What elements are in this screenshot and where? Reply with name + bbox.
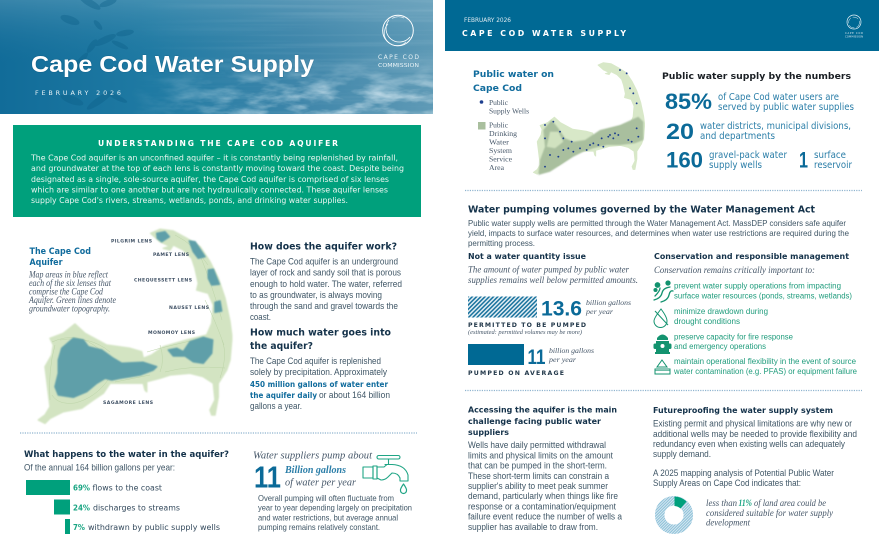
- donut chart: 11 percent: [660, 496, 688, 529]
- icon: stream and plants: [654, 281, 673, 302]
- comparison: not a water quantity issue: supplies remains well below permitted amounts.: [468, 275, 638, 285]
- text block: accessing the aquifer: supplier's ability to meet peak summer: [468, 481, 608, 491]
- text block: accessing the aquifer: failure event reduce the number of wells a: [468, 512, 622, 522]
- text block: water management act: yield, impacts to surface water resources, and determines when water use restrictions are required during the: [468, 228, 849, 238]
- item: surface water: surface water resources (ponds, streams, wetlands): [674, 292, 852, 300]
- stat: 85 percent: of Cape Cod water users are: [718, 92, 839, 103]
- item: fire response: and emergency operations: [674, 342, 766, 351]
- text block: accessing the aquifer: [468, 405, 622, 532]
- text block: how much water goes in: How much water goes into: [250, 328, 391, 339]
- donut caption: of land area could be: [754, 498, 826, 508]
- text block: futureproofing: Supply Areas on Cape Cod indicates that:: [653, 478, 801, 488]
- map caption: Aquifer. Green lines denote: [28, 295, 116, 305]
- list: conservation and responsible management: Conservation remains critically important to:: [654, 265, 815, 275]
- bar: pumped on average: 11: [528, 346, 546, 369]
- text block: how does the aquifer work: through the sand and gravel towards the: [250, 301, 398, 311]
- bar: permitted: per year: [585, 307, 613, 316]
- callout: 11 billion gallons: [253, 451, 412, 532]
- stat: 20: 20: [666, 119, 694, 144]
- text block: accessing the aquifer: limits and physical limits on the amount: [468, 450, 613, 460]
- text block: how much water goes in: the aquifer daily: [250, 390, 318, 400]
- text block: accessing the aquifer: response or a contamination/equipment: [468, 502, 616, 512]
- item: surface water: prevent water supply operations from impacting: [674, 282, 841, 291]
- text block: how does the aquifer work: coast.: [250, 312, 271, 322]
- item: drawdown: [654, 307, 768, 328]
- bar: 7 percent: withdrawn by public supply wells: [88, 523, 220, 532]
- callout: 11 billion gallons: Billion gallons: [284, 465, 346, 476]
- text block: accessing the aquifer: demand, particularly when things like fire: [468, 491, 618, 501]
- list: conservation and responsible management: [654, 251, 858, 376]
- bar: permitted: 13.6: [541, 298, 582, 321]
- stats: public water supply by the numbers: Public water supply by the numbers: [662, 72, 851, 82]
- stats: public water supply by the numbers: [662, 72, 854, 172]
- item: flexibility: maintain operational flexibility in the event of source: [674, 357, 857, 366]
- bar: 7 percent: [65, 519, 220, 534]
- bar: 7 percent: 7%: [73, 523, 85, 532]
- text block: how does the aquifer work: enough to hold water. The water, referred: [250, 279, 402, 289]
- map caption: comprise the Cape Cod: [29, 286, 103, 296]
- panel: understanding the aquifer: designated as a single, sole-source aquifer, the Cape Cod aquifer is comprised of six lenses: [31, 175, 389, 184]
- map lens labels: CHEQUESSETT LENS: [134, 278, 192, 284]
- logo small: COMMISSION: [845, 34, 863, 38]
- chart: what happens to the water: Of the annual 164 billion gallons per year:: [24, 462, 175, 472]
- legend: System: [489, 146, 512, 155]
- legend: Public: [489, 120, 509, 130]
- text block: futureproofing: [653, 405, 857, 488]
- callout: 11 billion gallons: Overall pumping will often fluctuate from: [258, 493, 394, 503]
- item: flexibility: water contamination (e.g. PFAS) or equipment failure: [673, 367, 858, 376]
- bar: pumped on average: [468, 344, 594, 377]
- map caption: Map areas in blue reflect: [28, 270, 108, 280]
- stat: 20: water districts, municipal divisions,: [700, 121, 851, 132]
- map heading: Aquifer: [30, 258, 63, 268]
- text block: water management act: [468, 205, 849, 248]
- bar: pumped on average: PUMPED ON AVERAGE: [468, 370, 564, 377]
- legend: Supply Wells: [489, 106, 529, 116]
- icon: crossed drop: [654, 309, 668, 328]
- text block: water management act: Water pumping volumes governed by the Water Management Act: [468, 205, 816, 216]
- map lens labels: PILGRIM LENS: [111, 238, 152, 244]
- text block: how does the aquifer work: How does the aquifer work?: [250, 242, 397, 252]
- legend: Public: [489, 98, 509, 107]
- panel: understanding the aquifer: [13, 125, 421, 217]
- stat: 85 percent: 85%: [665, 89, 712, 114]
- icon: faucet: [363, 456, 408, 494]
- callout: 11 billion gallons: 11: [254, 460, 281, 494]
- map: aquifer lenses: [38, 229, 232, 423]
- bar: pumped on average: billion gallons: [549, 346, 594, 355]
- item: fire response: preserve capacity for fire response: [674, 332, 794, 342]
- text block: accessing the aquifer: challenge facing public water: [468, 416, 602, 426]
- text block: how much water goes in: The Cape Cod aquifer is replenished: [250, 356, 381, 366]
- stat: 1: [799, 148, 852, 172]
- text block: how does the aquifer work: to as groundwater, is always moving: [250, 290, 382, 300]
- panel: understanding the aquifer: which are similar to one another but are not hydraulically connected. These aquifer lenses: [31, 186, 388, 194]
- page 1 header banner: [0, 0, 433, 114]
- comparison: not a water quantity issue: The amount of water pumped by public water: [468, 265, 629, 275]
- text block: accessing the aquifer: supplier has available to draw from.: [468, 522, 598, 532]
- text block: futureproofing: Existing permit and physical limitations are why new or: [653, 419, 852, 429]
- donut caption: 11%: [738, 498, 752, 508]
- item: flexibility: [655, 357, 858, 376]
- panel: understanding the aquifer: The Cape Cod aquifer is an unconfined aquifer – it is constantly being replenished by rainfall,: [30, 154, 398, 162]
- bar: permitted: PERMITTED TO BE PUMPED: [468, 322, 586, 329]
- panel: understanding the aquifer: and groundwater at the top of each lens is constantly moving toward the coast. Despite being: [31, 164, 404, 173]
- map caption: [28, 270, 116, 314]
- comparison: not a water quantity issue: [468, 251, 638, 377]
- bar: 69 percent: 69%: [73, 484, 90, 492]
- text block: how does the aquifer work: The Cape Cod aquifer is an underground: [250, 256, 398, 266]
- bar: 24 percent: 24%: [73, 504, 90, 512]
- text block: accessing the aquifer: Wells have daily permitted withdrawal: [468, 440, 606, 450]
- text block: how much water goes in: solely by precipitation. Approximately: [250, 367, 387, 377]
- icon: warning triangle and tank: [655, 360, 670, 374]
- text block: accessing the aquifer: These short-term limits can constrain a: [468, 471, 609, 481]
- bar: permitted: [468, 296, 631, 336]
- map: public water service areas and wells: [533, 63, 645, 175]
- stat: 20: [666, 119, 851, 144]
- stat: 85 percent: [665, 89, 854, 114]
- text block: futureproofing: additional wells may be needed to provide flexibility and: [653, 429, 857, 439]
- bar: permitted: (estimated: permitted volumes may be more): [468, 329, 582, 336]
- bar: pumped on average: per year: [548, 355, 576, 364]
- comparison: not a water quantity issue: Not a water quantity issue: [468, 251, 586, 261]
- stat: 160: supply wells: [709, 160, 762, 171]
- stat: 160: gravel-pack water: [709, 150, 787, 161]
- panel heading: public water on Cape Cod: [473, 69, 554, 94]
- panel heading: UNDERSTANDING THE CAPE COD AQUIFER: [98, 139, 338, 148]
- date line: FEBRUARY 2026: [35, 89, 121, 97]
- panel: understanding the aquifer: supply Cape Cod's rivers, streams, wetlands, ponds, and drinking water supplies.: [31, 196, 348, 205]
- text block: water management act: permitting process.: [468, 238, 535, 248]
- callout: 11 billion gallons: of water per year: [285, 478, 357, 489]
- stat: 1: 1: [799, 148, 808, 172]
- map lens labels: PAMET LENS: [153, 252, 189, 258]
- callout: 11 billion gallons: Water suppliers pump about: [253, 451, 373, 462]
- chart: what happens to the water: [24, 449, 229, 534]
- logo: Cape Cod Commission: [378, 15, 419, 69]
- text block: how much water goes in: or about 164 billion: [319, 390, 390, 400]
- text block: futureproofing: redundancy even when existing wells can adequately: [653, 439, 845, 449]
- title: Cape Cod Water Supply: [31, 51, 314, 77]
- text block: how does the aquifer work: [250, 242, 402, 322]
- donut caption: development: [706, 518, 750, 528]
- bar: 24 percent: discharges to streams: [93, 504, 180, 512]
- chart: what happens to the water: What happens to the water in the aquifer?: [24, 449, 229, 459]
- map heading: [30, 247, 91, 268]
- item: drawdown: drought conditions: [674, 317, 740, 326]
- panel heading: public water on Cape Cod: Cape Cod: [473, 83, 522, 94]
- list: conservation and responsible management: Conservation and responsible management: [654, 251, 849, 261]
- text block: how much water goes in: [250, 328, 391, 411]
- text block: futureproofing: A 2025 mapping analysis of Potential Public Water: [653, 468, 834, 478]
- logo small: CAPE COD: [845, 31, 863, 35]
- donut caption: considered suitable for water supply: [706, 508, 833, 518]
- bar: 69 percent: flows to the coast: [92, 484, 162, 492]
- logo: Cape Cod Commission: CAPE COD: [378, 54, 419, 61]
- map lens labels: MONOMOY LENS: [148, 330, 195, 336]
- legend: Service: [489, 154, 513, 164]
- page 2 header bar: FEBRUARY 2026: [464, 18, 511, 24]
- legend: Area: [489, 163, 505, 172]
- text block: how much water goes in: the aquifer?: [250, 341, 313, 352]
- stat: 20: and departments: [700, 131, 775, 142]
- map lens labels: [103, 238, 209, 406]
- logo small: [845, 15, 863, 38]
- page 2 header bar: CAPE COD WATER SUPPLY: [462, 29, 626, 38]
- page 2 header bar: [445, 0, 879, 51]
- bar: 69 percent: [26, 480, 162, 495]
- text block: how much water goes in: 450 million gallons of water enter: [250, 379, 389, 389]
- stat: 160: [666, 148, 787, 172]
- map heading: The Cape Cod: [30, 247, 91, 257]
- donut caption: less than: [706, 498, 737, 508]
- panel heading: public water on Cape Cod: Public water on: [473, 69, 554, 80]
- text block: how does the aquifer work: layer of rock and sandy soil that is porous: [250, 268, 401, 278]
- legend: Drinking: [489, 129, 517, 138]
- stat: 1: reservoir: [814, 160, 852, 171]
- text block: accessing the aquifer: suppliers: [468, 427, 509, 437]
- logo: Cape Cod Commission: COMMISSION: [378, 63, 419, 69]
- bar: permitted: billion gallons: [586, 298, 631, 307]
- text block: how much water goes in: gallons a year.: [250, 401, 302, 411]
- text block: water management act: Public water supply wells are permitted through the Water Management Act. MassDEP considers safe aquifer: [468, 218, 846, 228]
- text block: futureproofing: supply demand.: [653, 449, 711, 459]
- text block: accessing the aquifer: that can be pumped in the short-term.: [468, 460, 607, 470]
- map lens labels: NAUSET LENS: [169, 305, 209, 311]
- text block: accessing the aquifer: Accessing the aquifer is the main: [468, 405, 617, 415]
- icon: hydrant: [654, 334, 672, 354]
- donut caption: [706, 498, 833, 528]
- item: surface water: [654, 281, 852, 302]
- text block: futureproofing: Futureproofing the water supply system: [653, 405, 833, 415]
- item: drawdown: minimize drawdown during: [674, 307, 768, 316]
- legend: [478, 98, 529, 172]
- stat: 160: 160: [666, 148, 703, 172]
- map caption: groundwater topography.: [29, 304, 110, 314]
- map lens labels: SAGAMORE LENS: [103, 400, 153, 406]
- legend: Water: [489, 138, 510, 146]
- callout: 11 billion gallons: year to year depending largely on precipitation: [258, 503, 412, 513]
- item: fire response: [654, 332, 794, 354]
- callout: 11 billion gallons: pumping remains relatively constant.: [258, 522, 380, 532]
- map caption: each of the six lenses that: [29, 278, 111, 288]
- stat: 1: surface: [814, 150, 846, 161]
- callout: 11 billion gallons: and water restrictions, but average annual: [258, 512, 398, 522]
- bar: 24 percent: [54, 500, 180, 514]
- stat: 85 percent: served by public water supplies: [718, 102, 854, 113]
